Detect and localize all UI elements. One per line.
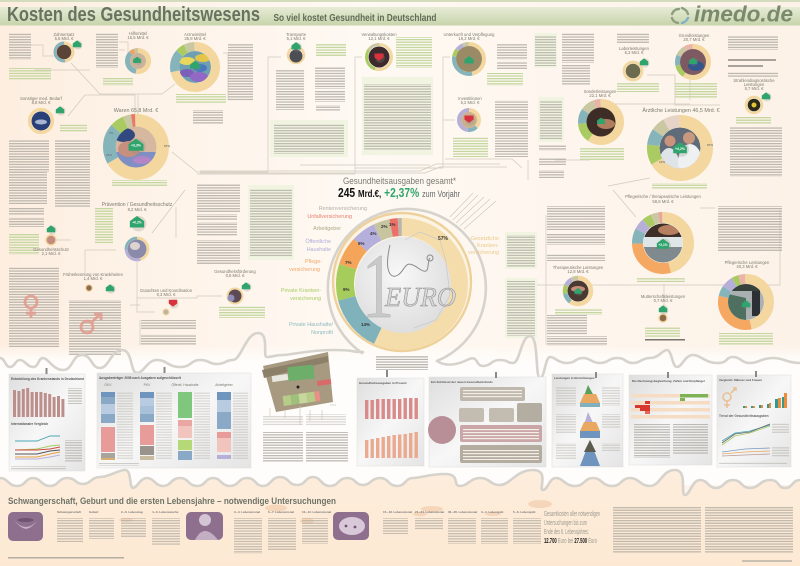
donut: Gutachten und Koordination [140, 288, 193, 315]
donut: Grundleistungen [678, 33, 710, 78]
title: Kosten des Gesundheitswesens [7, 4, 260, 26]
main pie: health spending by payer: 4% [370, 231, 377, 236]
donut: Mutterschaftsleistungen [641, 294, 686, 322]
panel: Ein Schlüssel der neuen Gesundheitsfonds (flow diagram): Ein Schlüssel der neuen Gesundheitsfonds [431, 380, 493, 384]
donut: Gesundheitsschutz: 2,1 Mrd. € [42, 251, 61, 256]
main pie: health spending by payer: 9% [343, 287, 350, 292]
donut: Verwaltungskosten [361, 32, 397, 70]
tiny text blocks (greeked: illegible in the reference) [9, 33, 782, 370]
illustration: wallet with money [262, 352, 333, 412]
donut: Waren [106, 108, 170, 174]
donut: Arzneimittel: Arzneimittel [184, 32, 206, 37]
bar chart: Krankenstand [13, 388, 64, 417]
donut: Sonstiger med. Bedarf: 8,8 Mrd. € [32, 100, 51, 105]
pie labels: versicherung [289, 267, 320, 273]
donut: Prävention / Gesundheitsschutz: +0,2% [132, 220, 142, 224]
donut: Strahlendiagnostische Leistungen: 5,7 Mrd. € [745, 86, 764, 91]
stacked column: PKV: PKV [144, 383, 151, 387]
total cost callout [544, 509, 600, 545]
line chart: international comparison [15, 436, 60, 459]
donut: Pflegerische / therapeutische Leistungen: +2,1% [658, 243, 668, 247]
line chart: spending trend [722, 424, 770, 456]
donut: Gutachten und Koordination: Gutachten und Koordination [140, 288, 193, 293]
donut: Sonstiger med. Bedarf: Sonstiger med. Bedarf [20, 96, 63, 101]
central headline [338, 176, 460, 200]
donut: Hilfsmittel: 15,5 Mrd. € [127, 35, 149, 40]
donut: Ärztliche Leistungen: 67% [707, 143, 713, 147]
stacked column: GKV [101, 383, 115, 460]
panel: Vergleich Männer und Frauen: Trend der Gesundheitsausgaben [719, 414, 769, 418]
donut: Zahnersatz: 5,5 Mrd. € [55, 36, 74, 41]
donut: Prävention / Gesundheitsschutz: Prävention / Gesundheitsschutz [102, 202, 173, 208]
checkups timeline columns: 2.–6. Lebenstag [121, 510, 143, 514]
donut: Gutachten und Koordination: 0,3 Mrd. € [157, 292, 176, 297]
donut: Pflegerische / therapeutische Leistungen: 58,8 Mrd. € [652, 199, 674, 204]
main pie: health spending by payer: 1% [389, 222, 396, 227]
stacked column: GKV: GKV [104, 383, 112, 387]
checkups timeline columns: 30.–36. Lebensmonat [448, 510, 477, 514]
logo: imedo.de: imedo.de [694, 2, 793, 26]
donut: Laborleistungen [619, 46, 650, 80]
panel: Entwicklung der Krankenstände: Entwicklung des Krankenstands in Deutschland [11, 377, 84, 381]
total cost callout: Untersuchungen bis zum [544, 518, 587, 527]
donut: Prävention / Gesundheitsschutz: 8,2 Mrd. € [128, 207, 147, 212]
donut: Strahlendiagnostische Leistungen: Leistungen [744, 82, 765, 87]
main pie: health spending by payer: 57% [438, 236, 449, 242]
donut: Sonderleistungen [582, 89, 620, 140]
main pie: health spending by payer: 7% [345, 260, 352, 265]
stacked column: Öffentl. Haushalte [171, 383, 199, 460]
pie labels: versicherung [290, 296, 321, 302]
donut: Pflegerische Leistungen [723, 260, 770, 325]
pie labels: Arbeitgeber [313, 226, 341, 232]
panel: Ein Schlüssel der neuen Gesundheitsfonds (flow diagram) [428, 377, 546, 467]
stacked column: Öffentl. Haushalte: Öffentl. Haushalte [171, 383, 199, 387]
pie labels: Öffentliche [305, 238, 331, 245]
bottom section background with wave [0, 470, 800, 566]
donut: Ärztliche Leistungen: +4,2% [675, 147, 686, 151]
pie labels: Rentenversicherung [319, 206, 367, 212]
donut: Gesundheitsförderung: Gesundheitsförderung [214, 269, 256, 274]
panel: Entwicklung der Krankenstände [9, 374, 85, 471]
pie labels: Private Kranken- [281, 288, 321, 294]
bar chart: spending per capita [365, 432, 418, 458]
donut: Ärztliche Leistungen: 10% [659, 160, 665, 164]
donut: Unterkunft und Verpflegung [444, 32, 495, 74]
pie labels: Nonprofit [311, 330, 334, 336]
donut: Arzneimittel [174, 32, 216, 88]
checkups timeline columns: 15.–18. Lebensmonat [383, 510, 412, 514]
donut: Transporte: Transporte [286, 32, 307, 37]
donut: Früherkennung von Krankheiten: Früherkennung von Krankheiten [63, 272, 124, 277]
donut: Investitionen: 5,2 Mrd. € [461, 100, 480, 105]
donut: Investitionen: Investitionen [458, 96, 482, 101]
checkups timeline columns: Schwangerschaft [57, 510, 81, 514]
donut: Ärztliche Leistungen [642, 107, 720, 180]
donut: Therapeutische Leistungen: 12,8 Mrd. € [567, 269, 589, 274]
donut: Verwaltungskosten: 12,1 Mrd. € [368, 36, 390, 41]
donut: Pflegerische / therapeutische Leistungen [625, 194, 701, 268]
donut: Waren: +3,3% [131, 144, 142, 148]
title band [0, 4, 800, 26]
pie labels: Kranken- [477, 243, 499, 249]
main pie: health spending by payer: 14% [361, 322, 370, 327]
checkups timeline columns: 21.–24. Lebensmonat [415, 510, 444, 514]
checkups timeline columns: 6.–7. Lebensmonat [268, 510, 294, 514]
bottom right text columns [613, 506, 793, 562]
donut: Pflegerische Leistungen: 40,3 Mrd. € [736, 264, 758, 269]
donut: Waren: 67% [164, 144, 170, 148]
donut: Zahnersatz: Zahnersatz [54, 32, 74, 37]
donut: Ärztliche Leistungen: Ärztliche Leistungen 46,5 Mrd. € [642, 107, 720, 114]
stacked column: Arbeitgeber: Arbeitgeber [215, 383, 234, 387]
panel: Leistungen in Einrichtungen (pyramids): Leistungen in Einrichtungen [554, 376, 595, 380]
donut: Prävention / Gesundheitsschutz [102, 202, 173, 260]
donut: Laborleistungen: 6,3 Mrd. € [625, 50, 644, 55]
panel: Vergleich Männer und Frauen [717, 375, 791, 467]
donut: Hilfsmittel [127, 31, 149, 72]
donut: Gesundheitsschutz [33, 225, 69, 256]
pie labels: versicherung [468, 250, 499, 256]
donut: Zahnersatz [54, 32, 83, 61]
main pie: health spending by payer: 6% [358, 241, 365, 246]
pie labels [281, 206, 499, 336]
donut: Strahlendiagnostische Leistungen [733, 78, 775, 113]
donut: Arzneimittel: 35,8 Mrd. € [184, 36, 206, 41]
panel: Gesundheitsausgaben in Prozent: Gesundheitsausgaben in Prozent [359, 381, 407, 385]
total cost callout: 12.700 Euro bei 27.500 Euro [544, 536, 597, 545]
donut: Waren: Waren 65,8 Mrd. € [114, 108, 158, 114]
photos: baby and mother in purple [8, 512, 369, 541]
main pie: health spending by payer: 1 [362, 235, 394, 337]
donut: Grundleistungen: 20,7 Mrd. € [683, 37, 705, 42]
donut: Gesundheitsförderung [214, 269, 256, 304]
stacked column: PKV [140, 383, 154, 460]
panel: Die Rettungsdienstausgaben (table): Die Rechnungsbegleichung, Zahler und Empfänger [632, 379, 706, 383]
donut: Früherkennung von Krankheiten: 1,4 Mrd. € [84, 276, 103, 281]
pie labels: Haushalte [307, 247, 331, 253]
donut: Mutterschaftsleistungen: Mutterschaftsleistungen [641, 294, 686, 299]
green notes [9, 37, 773, 345]
checkups timeline columns [57, 510, 541, 554]
checkups timeline columns: 3.–4. Lebensmonat [234, 510, 260, 514]
donut: Waren: 20% [106, 153, 112, 157]
footnote [8, 557, 124, 558]
main pie: health spending by payer: EURO [384, 282, 456, 312]
checkups timeline columns: Geburt [89, 510, 99, 514]
donut: Hilfsmittel: Hilfsmittel [129, 31, 147, 36]
connector lines [30, 42, 780, 345]
donut: Therapeutische Leistungen: Therapeutische Leistungen [553, 265, 604, 270]
panel: Leistungen in Einrichtungen (pyramids) [552, 374, 623, 467]
checkups timeline columns: 3.–4. Lebensjahr [481, 510, 505, 514]
panel: Ausgabenträger 2008 [97, 373, 251, 468]
bar chart: share of GDP [365, 398, 418, 419]
checkups timeline columns: 4.–6. Lebenswoche [152, 510, 179, 514]
pie labels: Private Haushalte/ [289, 322, 334, 328]
icon: male symbol [81, 314, 101, 333]
pale green info boxes [248, 33, 564, 338]
donut: Unterkunft und Verpflegung: 16,2 Mrd. € [458, 36, 480, 41]
donut: Früherkennung von Krankheiten [63, 272, 124, 294]
pie labels: Pflege- [305, 259, 322, 265]
pie labels: Gesetzliche [471, 236, 499, 242]
main pie: health spending by payer: 2% [381, 224, 388, 229]
total cost callout: Gesamtkosten aller notwendigen [544, 509, 600, 518]
central headline: Gesundheitsausgaben gesamt* [343, 176, 456, 186]
donut: Waren: 7% [109, 131, 114, 135]
bar chart: men and women by age [743, 393, 787, 408]
donut: Investitionen [458, 96, 482, 130]
panel: Entwicklung der Krankenstände: Internationaler Vergleich [11, 422, 48, 426]
donut: Sonstiger med. Bedarf [20, 96, 66, 132]
footprints [119, 500, 552, 524]
donut: Grundleistungen: Grundleistungen [679, 33, 710, 38]
donut: Mutterschaftsleistungen: 0,7 Mrd. € [654, 298, 673, 303]
donut: Unterkunft und Verpflegung: Unterkunft und Verpflegung [444, 32, 495, 37]
donut: Sonderleistungen: 22,1 Mrd. € [589, 93, 611, 98]
panel: Die Rettungsdienstausgaben (table) [629, 375, 712, 465]
panel: Vergleich Männer und Frauen: Vergleich: Männer und Frauen [719, 378, 762, 382]
panel: Gesundheitsausgaben in Prozent [357, 378, 424, 466]
main pie: health spending by payer [333, 213, 471, 351]
total cost callout: Ende des 6. Lebensjahres: [544, 527, 589, 536]
donut: Laborleistungen: Laborleistungen [619, 46, 650, 51]
donut: Therapeutische Leistungen [553, 265, 604, 304]
donut: Verwaltungskosten: Verwaltungskosten [361, 32, 397, 37]
donut: Transporte: 5,1 Mrd. € [287, 36, 306, 41]
donut: Gesundheitsschutz: Gesundheitsschutz [33, 247, 69, 252]
donut: Transporte [286, 32, 307, 63]
icons: pins on panels [46, 367, 757, 378]
central headline: 245 Mrd.€, +2,37% zum Vorjahr [338, 185, 460, 200]
donut: Sonderleistungen: Sonderleistungen [584, 89, 617, 94]
donut: Strahlendiagnostische Leistungen: Strahlendiagnostische [733, 78, 775, 83]
heading: pregnancy and early years: Schwangerschaft, Geburt und die ersten Lebensjahre – notwendige Untersuchungen [8, 496, 336, 506]
panel: Ausgabenträger 2008: Ausgabenträger 2008 nach Ausgaben aufgeschlüsselt [99, 376, 182, 380]
subtitle: So viel kostet Gesundheit in Deutschland [274, 12, 436, 24]
stacked column: Arbeitgeber [215, 383, 234, 459]
wave: top divider and ring around coin [0, 209, 800, 378]
donut: Pflegerische Leistungen: Pflegerische Leistungen [725, 260, 770, 265]
donut: Pflegerische / therapeutische Leistungen: Pflegerische / therapeutische Leistungen [625, 194, 701, 199]
wallet callouts and text [263, 405, 348, 462]
pie labels: Unfallversicherung [307, 214, 352, 220]
icon: gender symbols [723, 388, 736, 408]
checkups timeline columns: 10.–12. Lebensmonat [302, 510, 331, 514]
checkups timeline columns: 5.–6. Lebensjahr [513, 510, 537, 514]
donut: Gesundheitsförderung: 0,8 Mrd. € [226, 273, 245, 278]
icon: female symbol [25, 296, 37, 318]
